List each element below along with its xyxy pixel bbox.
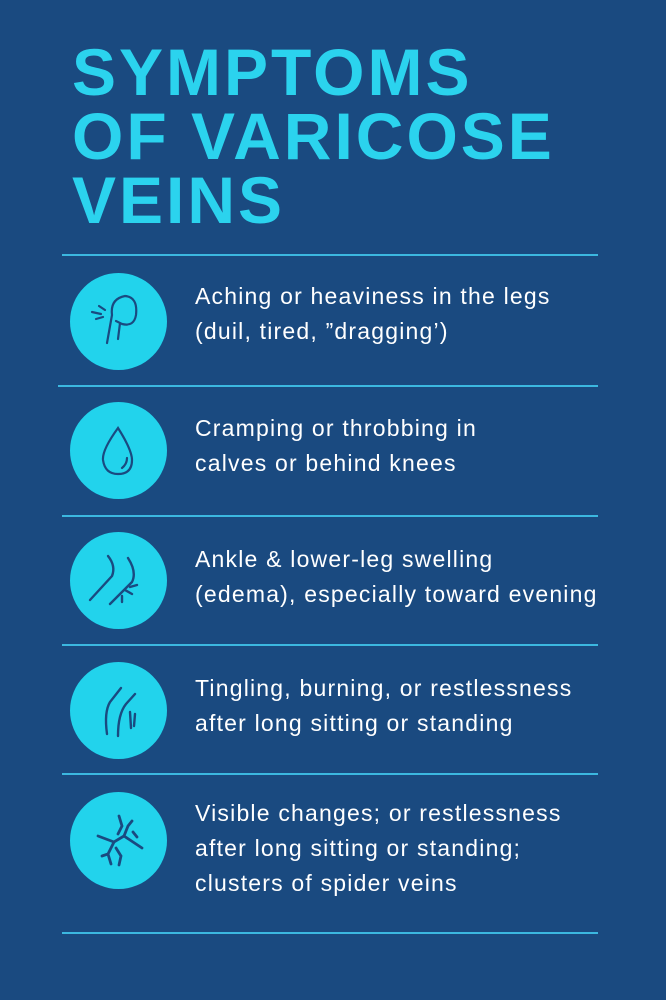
text: after long sitting or standing <box>195 710 514 736</box>
text <box>195 415 477 476</box>
text: Aching or heaviness in the legs <box>195 283 551 309</box>
text: Cramping or throbbing in <box>195 415 477 441</box>
text: (duil, tired, ”dragging’) <box>195 318 449 344</box>
icon: spider veins <box>70 792 167 889</box>
row 3: swelling <box>70 532 598 629</box>
title: VEINS <box>72 163 285 237</box>
text: (edema), especially toward evening <box>195 581 598 607</box>
text <box>195 675 572 736</box>
text <box>195 800 562 896</box>
text: Ankle & lower-leg swelling <box>195 546 493 572</box>
text: calves or behind knees <box>195 450 457 476</box>
title <box>72 35 555 237</box>
text: Visible changes; or restlessness <box>195 800 562 826</box>
text: after long sitting or standing; <box>195 835 521 861</box>
row 5: visible changes <box>70 792 562 896</box>
text <box>195 546 598 607</box>
icon: leg lines <box>70 662 167 759</box>
row 1: aching <box>70 273 551 370</box>
row 4: tingling <box>70 662 572 759</box>
text <box>195 283 551 344</box>
row 2: cramping <box>70 402 477 499</box>
title: OF VARICOSE <box>72 99 555 173</box>
icon: ankle <box>70 532 167 629</box>
icon: drop <box>70 402 167 499</box>
title: SYMPTOMS <box>72 35 473 109</box>
icon: leg ache <box>70 273 167 370</box>
text: clusters of spider veins <box>195 870 458 896</box>
text: Tingling, burning, or restlessness <box>195 675 572 701</box>
